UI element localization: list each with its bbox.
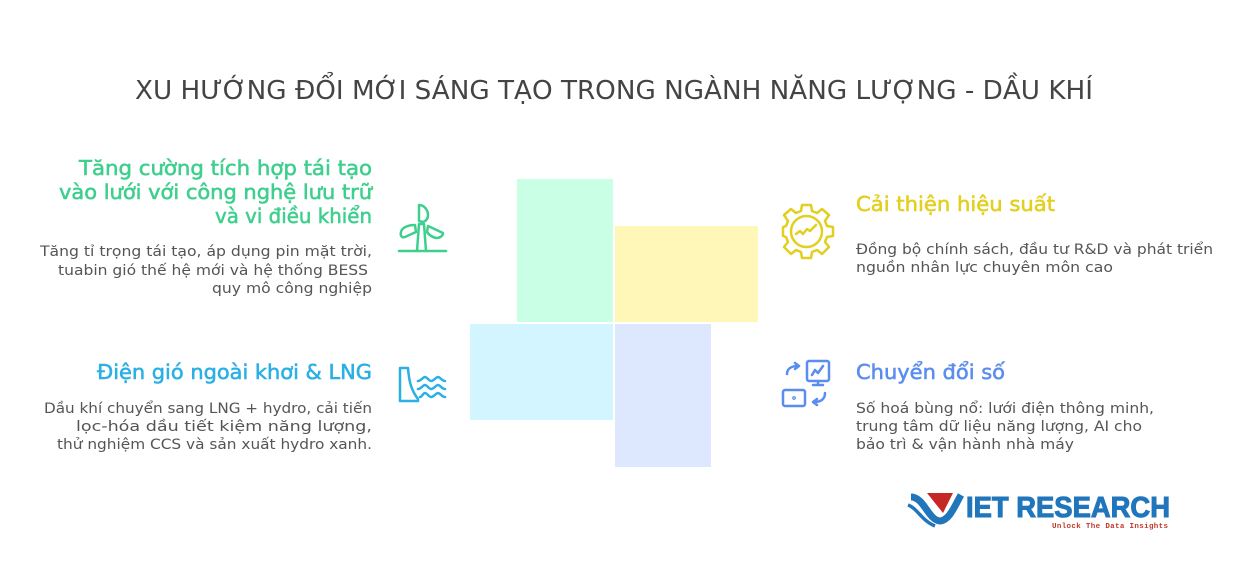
text block: efficiency: Đồng bộ chính sách, đầu tư R&D và phát triển [856, 241, 1213, 258]
text block: renewable integration: quy mô công nghiệp [212, 281, 372, 297]
heading: offshore wind and LNG: Điện gió ngoài khơi & LNG [97, 360, 372, 384]
icon: dam and water [400, 368, 445, 401]
heading: renewable integration: và vi điều khiển [215, 204, 372, 228]
icon: gear with chart [783, 205, 833, 258]
panel: offshore wind and LNG [44, 360, 445, 453]
heading: digital transformation: Chuyển đổi số [856, 360, 1006, 384]
icon: wind turbine [399, 205, 446, 251]
panel: renewable integration [39, 156, 446, 297]
text block: digital transformation: trung tâm dữ liệu năng lượng, AI cho [856, 419, 1142, 435]
text block: digital transformation: Số hoá bùng nổ: lưới điện thông minh, [856, 400, 1154, 417]
text block: efficiency [856, 241, 1213, 276]
text block: offshore wind and LNG: thử nghiệm CCS và sản xuất hydro xanh. [57, 437, 372, 453]
text block: offshore wind and LNG: Dầu khí chuyển sang LNG + hydro, cải tiến [44, 400, 372, 417]
panel: four-square diagram [470, 179, 758, 467]
text block: offshore wind and LNG [44, 400, 372, 453]
text block: renewable integration [39, 244, 372, 297]
heading: renewable integration [59, 156, 373, 228]
logo: Viet Research [908, 492, 1170, 531]
logo wordmark: IET RESEARCH [966, 492, 1170, 524]
logo mark [908, 493, 961, 526]
icon: digital exchange [783, 361, 829, 406]
panel: digital transformation [783, 360, 1154, 453]
text block: renewable integration: tuabin gió thế hệ mới và hệ thống BESS [58, 262, 368, 279]
text block: offshore wind and LNG: lọc-hóa dầu tiết kiệm năng lượng, [76, 418, 372, 435]
text block: renewable integration: Tăng tỉ trọng tái tạo, áp dụng pin mặt trời, [39, 244, 372, 260]
logo tagline: Unlock The Data Insights [1052, 523, 1168, 531]
title: XU HƯỚNG ĐỔI MỚI SÁNG TẠO TRONG NGÀNH NĂNG LƯỢNG - DẦU KHÍ [135, 71, 1093, 106]
text block: efficiency: nguồn nhân lực chuyên môn cao [856, 259, 1113, 276]
heading: renewable integration: Tăng cường tích hợp tái tạo [78, 156, 372, 180]
panel: efficiency [783, 192, 1213, 276]
text block: digital transformation: bảo trì & vận hành nhà máy [856, 437, 1074, 453]
text block: digital transformation [856, 400, 1154, 453]
heading: efficiency: Cải thiện hiệu suất [856, 192, 1055, 216]
heading: renewable integration: vào lưới với công nghệ lưu trữ [59, 180, 373, 204]
